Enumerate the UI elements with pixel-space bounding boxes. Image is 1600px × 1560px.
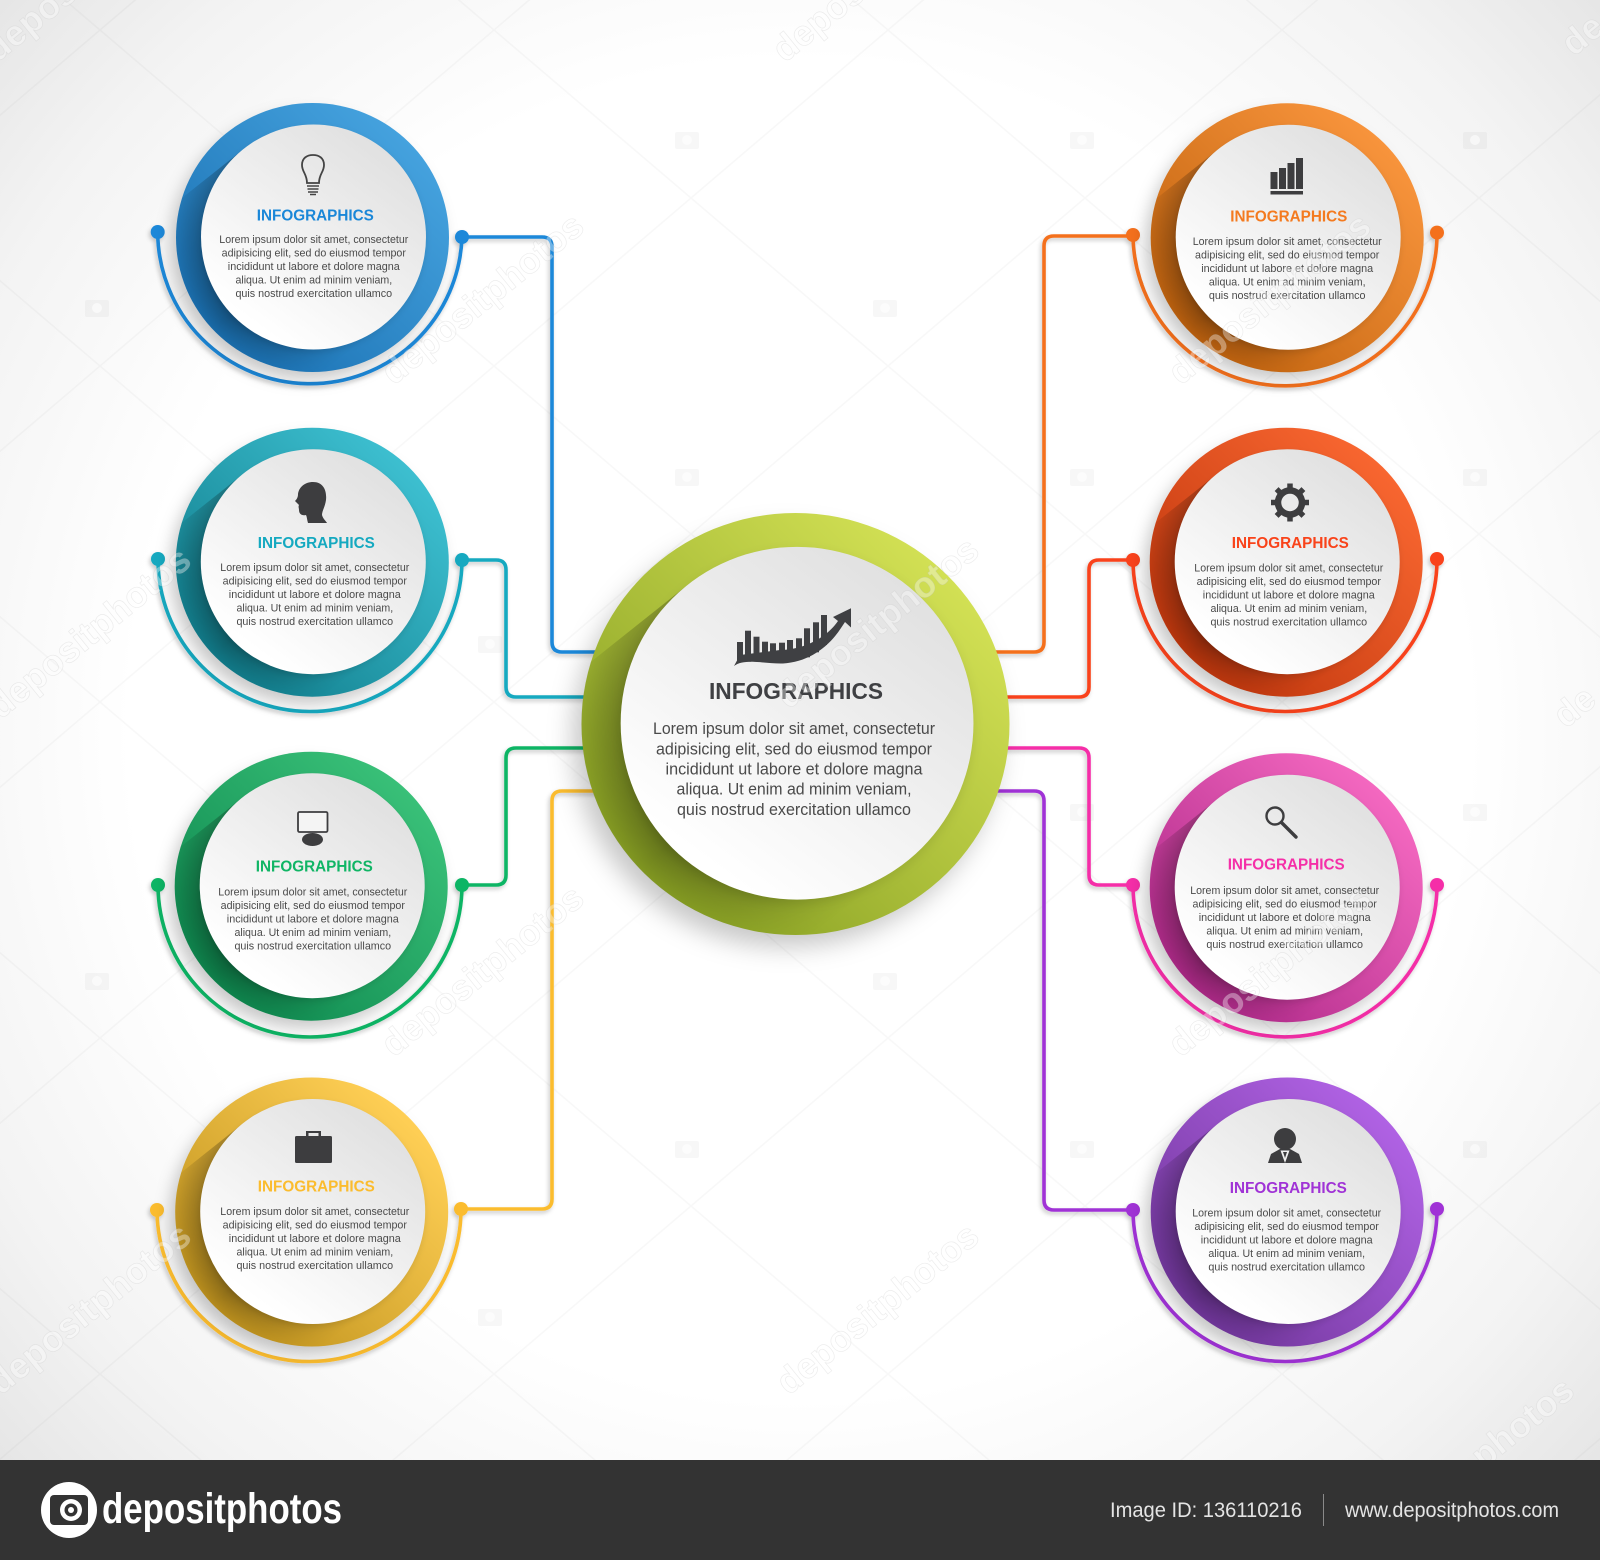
text block: central body (653, 719, 935, 819)
watermarks: depositphotos (768, 528, 986, 716)
connector: orange (990, 226, 1444, 652)
panel: green node (85, 752, 448, 1098)
text block: central body: adipisicing elit, sed do eiusmod tempor (656, 739, 932, 758)
text block: red (1194, 562, 1384, 628)
panel: orange node (1061, 103, 1424, 450)
panel: pink node (1060, 753, 1423, 1099)
text block: pink: adipisicing elit, sed do eiusmod tempor (1193, 898, 1377, 910)
text block: yellow: adipisicing elit, sed do eiusmod tempor (223, 1220, 407, 1232)
text block: pink: Lorem ipsum dolor sit amet, consectetur (1190, 885, 1379, 897)
text block: teal: incididunt ut labore et dolore magna (229, 589, 401, 601)
watermarks: photos (1463, 1369, 1582, 1476)
panel: teal node (87, 428, 449, 774)
text block: central body: aliqua. Ut enim ad minim veniam, (676, 780, 912, 799)
text block: central body: quis nostrud exercitation ullamco (677, 800, 911, 819)
text block: pink: aliqua. Ut enim ad minim veniam, (1206, 925, 1363, 937)
text block: teal: quis nostrud exercitation ullamco (236, 616, 393, 628)
text block: red: quis nostrud exercitation ullamco (1210, 616, 1367, 628)
icon: rising bar chart with arrow (734, 608, 851, 666)
connector: blue (151, 225, 600, 652)
text block: orange: Lorem ipsum dolor sit amet, consectetur (1193, 236, 1382, 248)
text block: purple (1192, 1207, 1381, 1273)
heading: red: INFOGRAPHICS (1232, 535, 1349, 552)
text block: green (218, 886, 408, 952)
text block: teal (220, 562, 410, 628)
watermarks: depositphotos (768, 1214, 986, 1402)
text block: pink: incididunt ut labore et dolore magna (1199, 912, 1371, 924)
text block: purple: aliqua. Ut enim ad minim veniam, (1208, 1248, 1365, 1260)
panel: blue node (87, 103, 449, 449)
heading: green: INFOGRAPHICS (256, 858, 373, 875)
icon: bar chart (1270, 158, 1303, 194)
text block: teal: adipisicing elit, sed do eiusmod tempor (223, 575, 407, 587)
heading: teal: INFOGRAPHICS (258, 535, 375, 552)
text block: red: aliqua. Ut enim ad minim veniam, (1210, 603, 1367, 615)
text block: red: incididunt ut labore et dolore magna (1203, 589, 1375, 601)
watermarks: depositphotos (1160, 204, 1378, 392)
heading: yellow: INFOGRAPHICS (258, 1179, 375, 1196)
text block: orange: quis nostrud exercitation ullamco (1209, 290, 1366, 302)
watermarks: depositphotos (1160, 876, 1378, 1064)
connector: pink (1000, 748, 1444, 1037)
text block: green: Lorem ipsum dolor sit amet, consectetur (218, 886, 408, 898)
text block: green: quis nostrud exercitation ullamco (234, 940, 391, 952)
icon: head silhouette (295, 482, 327, 523)
text block: yellow: Lorem ipsum dolor sit amet, consectetur (220, 1206, 410, 1218)
heading: central title: INFOGRAPHICS (709, 678, 883, 704)
panel: central circle (441, 513, 1010, 1056)
text block: purple: adipisicing elit, sed do eiusmod tempor (1195, 1221, 1379, 1233)
text block: teal: Lorem ipsum dolor sit amet, consectetur (220, 562, 410, 574)
text block: blue: quis nostrud exercitation ullamco (235, 288, 392, 300)
text block: red: adipisicing elit, sed do eiusmod tempor (1197, 576, 1381, 588)
footer bar (0, 1460, 1600, 1560)
text block: central body: Lorem ipsum dolor sit amet, consectetur (653, 719, 935, 738)
text block: blue: aliqua. Ut enim ad minim veniam, (235, 274, 392, 286)
icon: briefcase (295, 1131, 332, 1163)
text block: yellow (220, 1206, 410, 1272)
text block: red: Lorem ipsum dolor sit amet, consectetur (1194, 562, 1384, 574)
heading: purple: INFOGRAPHICS (1230, 1180, 1347, 1197)
text block: green: adipisicing elit, sed do eiusmod tempor (221, 900, 405, 912)
text block: yellow: quis nostrud exercitation ullamco (236, 1260, 393, 1272)
icon: footer camera logo (41, 1482, 97, 1538)
icon: monitor (298, 812, 328, 846)
text block: purple: Lorem ipsum dolor sit amet, consectetur (1192, 1207, 1381, 1219)
panel: red node (1060, 428, 1423, 774)
heading: pink: INFOGRAPHICS (1228, 856, 1345, 873)
heading: orange: INFOGRAPHICS (1230, 208, 1347, 225)
connector: purple (990, 791, 1444, 1362)
connector: teal (151, 552, 590, 712)
text block: green: aliqua. Ut enim ad minim veniam, (234, 927, 391, 939)
connector: green (151, 748, 590, 1037)
text block: orange (1193, 236, 1382, 302)
text block: purple: quis nostrud exercitation ullamco (1208, 1261, 1365, 1273)
text block: blue (219, 234, 409, 300)
icon: light bulb (302, 155, 324, 194)
text block: central body: incididunt ut labore et dolore magna (666, 760, 923, 778)
heading: blue: INFOGRAPHICS (257, 207, 374, 224)
connector: yellow (150, 791, 600, 1362)
text block: yellow: aliqua. Ut enim ad minim veniam, (236, 1247, 393, 1259)
text block: pink: quis nostrud exercitation ullamco (1206, 939, 1363, 951)
text block: teal: aliqua. Ut enim ad minim veniam, (236, 602, 393, 614)
footer brand name: depositphotos (102, 1485, 342, 1533)
icon: magnifier (1266, 808, 1296, 837)
panel: yellow node (86, 1078, 448, 1424)
text block: orange: aliqua. Ut enim ad minim veniam, (1209, 276, 1366, 288)
text block: blue: incididunt ut labore et dolore magna (228, 261, 400, 273)
text block: orange: incididunt ut labore et dolore magna (1201, 263, 1374, 275)
watermarks: depositphotos (373, 204, 591, 392)
text block: blue: Lorem ipsum dolor sit amet, consectetur (219, 234, 409, 246)
text block: purple: incididunt ut labore et dolore magna (1201, 1234, 1373, 1246)
text block: green: incididunt ut labore et dolore magna (227, 913, 399, 925)
connector: red (1000, 552, 1444, 712)
text block: pink (1190, 885, 1379, 951)
icon: business person (1268, 1128, 1302, 1163)
text block: yellow: incididunt ut labore et dolore magna (229, 1233, 401, 1245)
footer image id: Image ID: 136110216 (1110, 1499, 1302, 1522)
icon: gear (1271, 484, 1309, 522)
panel: purple node (1061, 1078, 1424, 1424)
text block: orange: adipisicing elit, sed do eiusmod tempor (1195, 249, 1380, 261)
text block: blue: adipisicing elit, sed do eiusmod tempor (222, 247, 406, 259)
watermarks: depositphotos (373, 876, 591, 1064)
footer url: www.depositphotos.com (1344, 1499, 1559, 1522)
